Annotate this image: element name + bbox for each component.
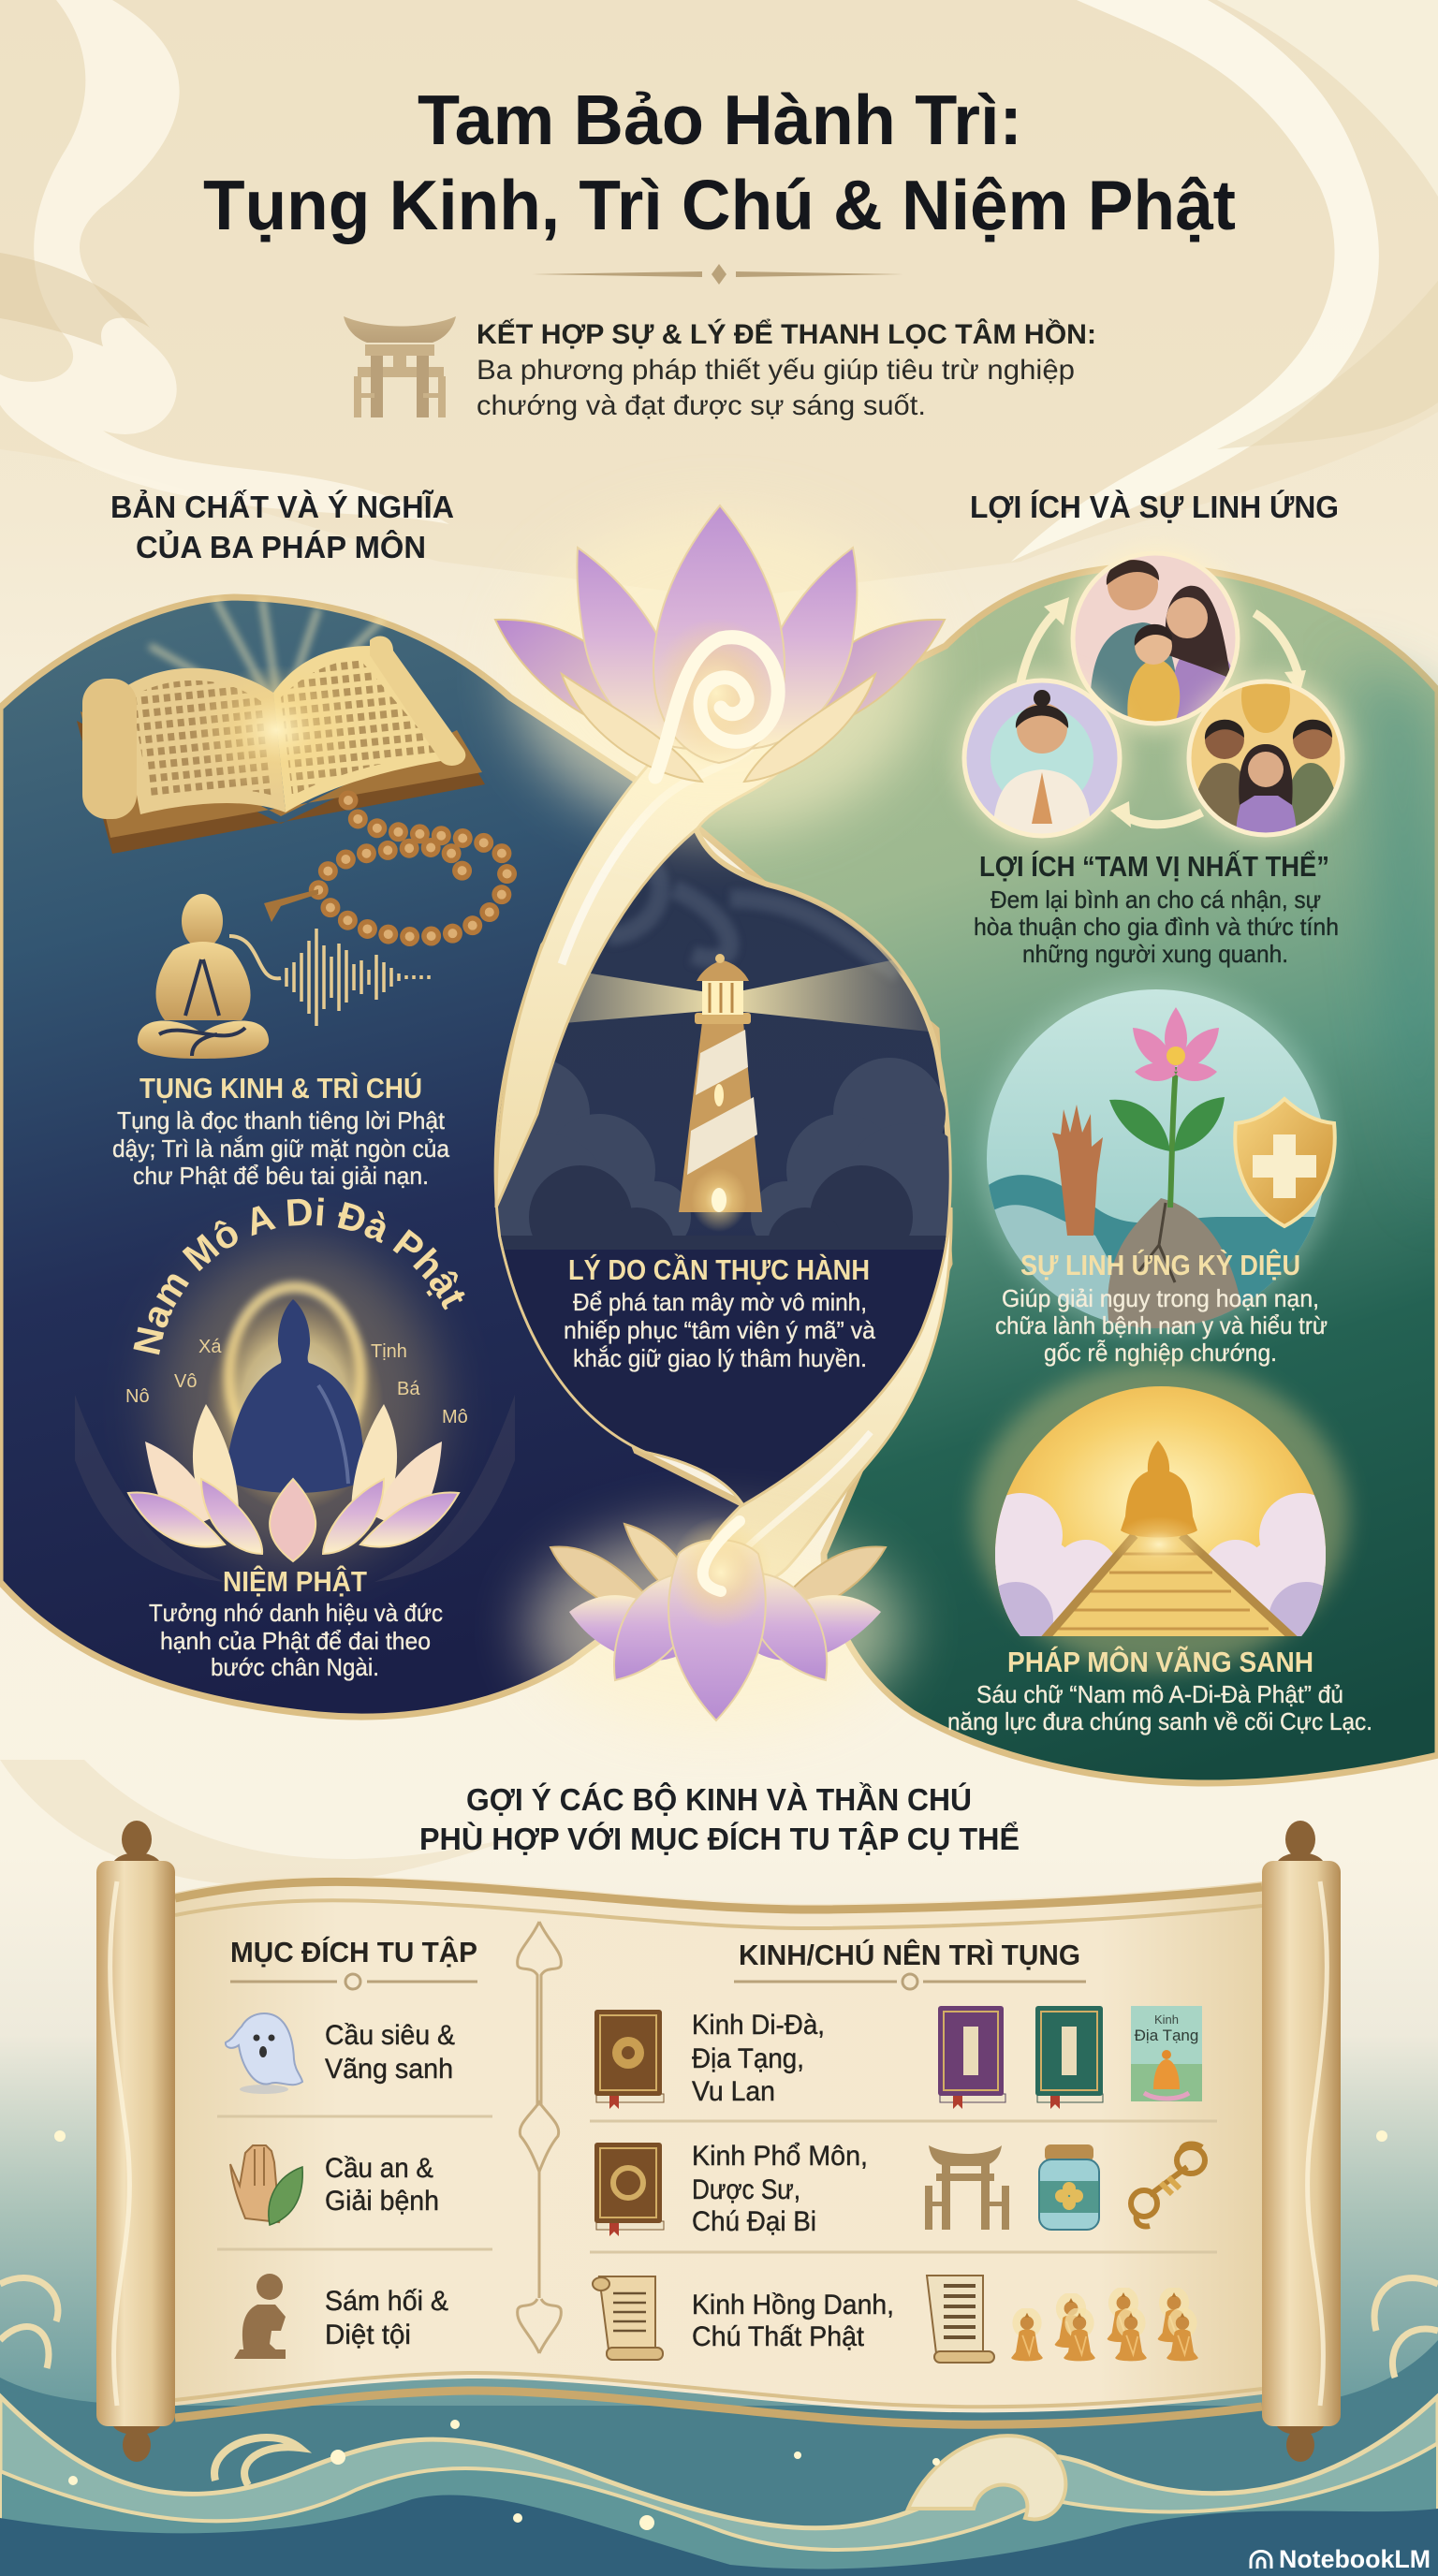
left roller <box>96 1821 175 2462</box>
icon: brown sutra book <box>594 2010 664 2109</box>
text: niệm phật: bước chân Ngài. <box>211 1653 379 1681</box>
icon: small gate <box>925 2145 1009 2230</box>
text: sám hối: Diệt tội <box>325 2320 411 2350</box>
column heading: purpose <box>230 1935 477 1989</box>
text: niệm phật <box>149 1564 443 1681</box>
text: lý do: Để phá tan mây mờ vô minh, <box>573 1288 867 1316</box>
icon: Địa Tạng book cover <box>1131 2006 1202 2101</box>
heading: left section: BẢN CHẤT VÀ Ý NGHĨA <box>110 490 454 524</box>
text: kinh hồng danh: Chú Thất Phật <box>692 2321 865 2352</box>
icon: Địa Tạng book cover: Kinh <box>1154 2012 1179 2027</box>
background: green blob teal shade <box>1348 655 1438 1217</box>
text: pháp môn vãng sanh: PHÁP MÔN VÃNG SANH <box>1007 1645 1313 1678</box>
text: sám hối: Sám hối & <box>325 2286 448 2317</box>
text: kinh phổ môn: Kinh Phổ Môn, <box>692 2141 868 2172</box>
icon: three unity circles <box>956 546 1351 844</box>
text: kinh hồng danh <box>692 2290 894 2352</box>
icon: arrows <box>1020 608 1299 825</box>
text: kinh hồng danh: Kinh Hồng Danh, <box>692 2290 894 2320</box>
text: tụng kinh: chư Phật để bêu tai giải nạn. <box>133 1162 429 1190</box>
icon: brown book knot <box>594 2143 664 2236</box>
heading: right section: LỢI ÍCH VÀ SỰ LINH ỨNG <box>970 490 1339 524</box>
group circle <box>1181 662 1351 843</box>
text: sự linh ứng: SỰ LINH ỨNG KỲ DIỆU <box>1020 1248 1300 1281</box>
text: cầu an: Giải bệnh <box>325 2186 439 2217</box>
small letters: Xá <box>198 1337 222 1357</box>
icon: purple book <box>938 2006 1005 2109</box>
icon: kneeling figure <box>234 2274 286 2359</box>
ribbon: lower golden stream <box>706 1208 951 1586</box>
smoke swirls <box>609 864 902 978</box>
column heading: sutras <box>734 1938 1086 1989</box>
icon: prayer beads <box>264 800 507 937</box>
title divider <box>532 264 903 285</box>
text: cầu siêu: Vãng sanh <box>325 2054 453 2085</box>
parchment <box>175 1876 1262 2412</box>
text: kinh di-đà: Kinh Di-Đà, <box>692 2010 825 2041</box>
text: kinh di-đà: Địa Tạng, <box>692 2043 804 2074</box>
text: cầu an <box>325 2153 439 2217</box>
title: Tụng Kinh, Trì Chú & Niệm Phật <box>203 166 1236 244</box>
text: pháp môn vãng sanh: Sáu chữ “Nam mô A-Di-Đà Phật” đủ <box>976 1680 1343 1708</box>
text: tam vị nhất thể: những người xung quanh. <box>1022 940 1288 968</box>
icon: top lotus <box>495 505 945 833</box>
text: sự linh ứng: Giúp giải nguy trong hoạn nạn, <box>1002 1284 1319 1312</box>
small letters: Bá <box>397 1379 420 1399</box>
text: niệm phật: hạnh của Phật để đai theo <box>160 1627 431 1655</box>
text: kinh phổ môn: Dược Sư, <box>692 2174 800 2205</box>
column heading: sutras: KINH/CHÚ NÊN TRÌ TỤNG <box>739 1938 1080 1971</box>
text: kinh phổ môn <box>692 2141 868 2237</box>
text: tụng kinh <box>112 1071 449 1190</box>
icon: list scroll <box>927 2276 994 2363</box>
text: niệm phật: NIỆM PHẬT <box>223 1564 367 1598</box>
icon: seven Buddhas <box>1011 2287 1198 2361</box>
small letters: Nô <box>125 1386 150 1407</box>
title <box>203 80 1236 244</box>
text: tam vị nhất thể: LỢI ÍCH “TAM VỊ NHẤT THỂ” <box>979 850 1329 883</box>
text: lý do: nhiếp phục “tâm viên ý mã” và <box>564 1316 876 1344</box>
text: tam vị nhất thể: Đem lại bình an cho cá nhận, sự <box>990 886 1321 914</box>
icon: open sutra book <box>77 599 485 854</box>
text: tụng kinh: Tụng là đọc thanh tiêng lời Phật <box>117 1106 446 1134</box>
text: kinh di-đà: Vu Lan <box>692 2076 775 2107</box>
small letters: Tịnh <box>371 1341 407 1362</box>
icon: paper scroll <box>593 2276 663 2360</box>
name arc: Nam Mô A Di Đà Phật <box>133 1197 465 1355</box>
icon: bottom lotus <box>529 1516 903 1732</box>
text: tụng kinh: dậy; Trì là nắm giữ mặt ngòn của <box>112 1134 449 1163</box>
swirl core <box>651 618 782 777</box>
text: sám hối <box>325 2286 448 2350</box>
heading: suggestions <box>419 1781 1020 1856</box>
title: Tam Bảo Hành Trì: <box>418 80 1022 159</box>
text: lý do: LÝ DO CẦN THỰC HÀNH <box>568 1253 870 1286</box>
text: sự linh ứng: gốc rễ nghiệp chướng. <box>1044 1339 1277 1367</box>
icon: Địa Tạng book cover: Địa Tạng <box>1135 2027 1198 2044</box>
heading: left section: CỦA BA PHÁP MÔN <box>136 529 426 564</box>
text: lý do: khắc giữ giao lý thâm huyền. <box>573 1344 867 1372</box>
decorative waves bottom <box>0 2130 1438 2576</box>
person circle <box>956 672 1128 844</box>
icon: torii gate <box>344 316 456 417</box>
text: tam vị nhất thể <box>974 850 1339 968</box>
clouds <box>498 1058 949 1251</box>
icon: medicine jar <box>1039 2144 1099 2230</box>
text: pháp môn vãng sanh: năng lực đưa chúng sanh về cõi Cực Lạc. <box>947 1707 1372 1735</box>
text: sự linh ứng: chữa lành bệnh nan y và hiểu trừ <box>995 1311 1328 1339</box>
right roller <box>1262 1821 1341 2462</box>
icon: hand with leaf <box>230 2145 302 2225</box>
panel: right green blob <box>693 566 1438 1783</box>
panel: scroll <box>96 1821 1341 2462</box>
panel: central egg with lighthouse <box>494 831 952 1504</box>
text: cầu an: Cầu an & <box>325 2153 433 2184</box>
icon: vajra <box>1131 2144 1205 2226</box>
subtitle <box>477 318 1096 421</box>
text: cầu siêu: Cầu siêu & <box>325 2020 455 2051</box>
subtitle: chướng và đạt được sự sáng suốt. <box>477 390 926 421</box>
text: tam vị nhất thể: hòa thuận cho gia đình và thức tính <box>974 913 1339 941</box>
text: cầu siêu <box>325 2020 455 2085</box>
text: tụng kinh: TỤNG KINH & TRÌ CHÚ <box>139 1071 422 1105</box>
column heading: purpose: MỤC ĐÍCH TU TẬP <box>230 1935 477 1969</box>
text: kinh phổ môn: Chú Đại Bi <box>692 2206 816 2237</box>
small letters: Mô <box>442 1407 468 1427</box>
text: pháp môn vãng sanh <box>947 1645 1372 1735</box>
icon: Buddha silhouette on lotus with name arc <box>75 1197 515 1589</box>
small letters <box>125 1337 468 1427</box>
subtitle: KẾT HỢP SỰ & LÝ ĐỂ THANH LỌC TÂM HỒN: <box>477 318 1096 350</box>
text: lý do <box>564 1253 876 1372</box>
panel: left navy blob <box>0 597 749 1717</box>
icon: ghost <box>226 2013 302 2094</box>
family circle <box>1065 546 1245 731</box>
ribbon: upper golden stream <box>496 646 803 1208</box>
heading: suggestions: GỢI Ý CÁC BỘ KINH VÀ THẦN CHÚ <box>466 1781 972 1817</box>
text: kinh di-đà <box>692 2010 825 2107</box>
text: niệm phật: Tưởng nhớ danh hiệu và đức <box>149 1599 443 1627</box>
icon: protective dome with flower, hand and shield <box>978 981 1339 1339</box>
subtitle: Ba phương pháp thiết yếu giúp tiêu trừ nghiệp <box>477 355 1075 386</box>
logo: NotebookLM: NotebookLM <box>1279 2545 1431 2573</box>
heading: left section <box>110 490 454 564</box>
light beams <box>569 960 929 1032</box>
small letters: Vô <box>174 1371 197 1392</box>
icon: green book <box>1035 2006 1103 2109</box>
text: sự linh ứng <box>995 1248 1328 1367</box>
center ornament divider <box>518 1922 561 2353</box>
icon: chanting figure with sound wave <box>138 894 429 1059</box>
icon: lighthouse <box>679 954 762 1232</box>
icon: pure land arch with Buddha and stairs <box>974 1362 1348 1671</box>
heading: suggestions: PHÙ HỢP VỚI MỤC ĐÍCH TU TẬP CỤ THỂ <box>419 1822 1020 1856</box>
